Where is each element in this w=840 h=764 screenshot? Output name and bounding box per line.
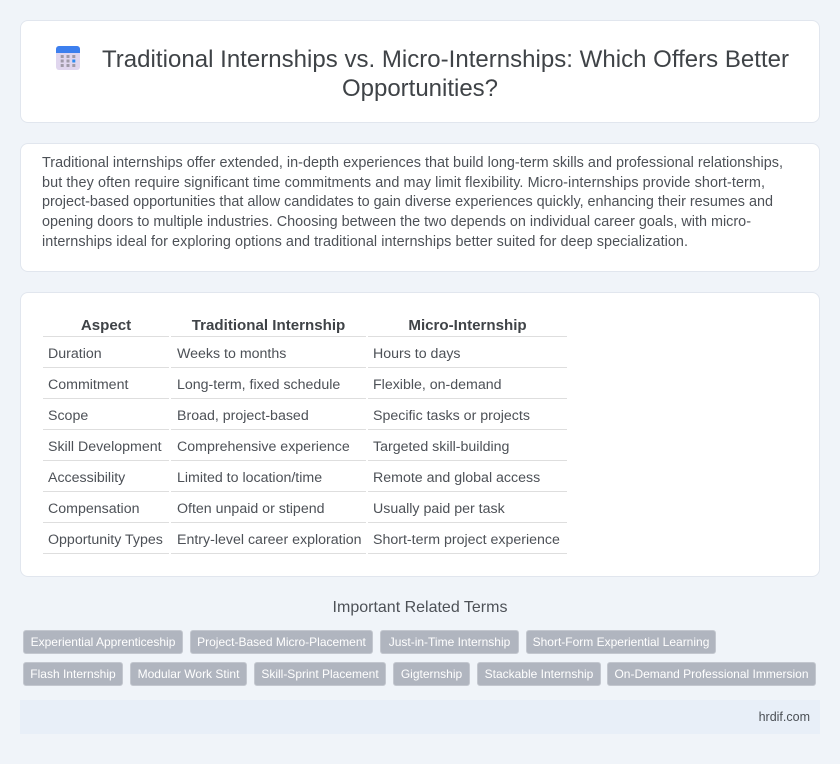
text block: introduction	[42, 155, 783, 250]
row: accessibility	[48, 470, 540, 486]
related terms tags: Stackable Internship	[485, 667, 593, 681]
related terms tags: Project-Based Micro-Placement	[197, 635, 366, 649]
row: skill development	[48, 439, 509, 455]
table header: aspect: Aspect	[81, 317, 131, 334]
related terms tags: Flash Internship	[30, 667, 116, 681]
panel: comparison table	[20, 292, 820, 577]
related terms tags: On-Demand Professional Immersion	[614, 667, 809, 681]
panel: comparison table: Short-term project experience	[373, 532, 560, 548]
row: commitment	[48, 377, 502, 393]
panel: comparison table: Comprehensive experience	[177, 439, 350, 455]
panel: header	[20, 20, 820, 123]
panel: comparison table: Limited to location/time	[177, 470, 322, 486]
related terms tags: Short-Form Experiential Learning	[533, 635, 709, 649]
heading: important related terms: Important Related Terms	[333, 599, 507, 616]
title	[102, 46, 789, 102]
row: skill development: Skill Development	[48, 439, 162, 455]
panel: comparison table: Flexible, on-demand	[373, 377, 502, 393]
row: commitment: Commitment	[48, 377, 128, 393]
panel: comparison table: Long-term, fixed schedule	[177, 377, 340, 393]
panel: comparison table: Specific tasks or projects	[373, 408, 530, 424]
panel: comparison table: Targeted skill-building	[373, 439, 509, 455]
row: duration	[48, 346, 461, 362]
row: accessibility: Accessibility	[48, 470, 125, 486]
text block: introduction: internships ideal for exploring options and traditional internships better suited for deep specialization.	[42, 234, 688, 250]
icon: calendar	[56, 46, 80, 70]
row: compensation: Compensation	[48, 501, 140, 517]
text block: introduction: Traditional internships offer extended, in-depth experiences that build long-term skills and professional relationships,	[42, 155, 783, 171]
related terms tags: Experiential Apprenticeship	[31, 635, 175, 649]
table header: micro-internship: Micro-Internship	[408, 317, 527, 334]
title: Traditional Internships vs. Micro-Internships: Which Offers Better	[102, 46, 789, 73]
row: scope: Scope	[48, 408, 88, 424]
text block: introduction: project-based opportunities that allow candidates to gain diverse experiences quickly, enhancing their resumes and	[42, 194, 773, 210]
table header: traditional internship: Traditional Internship	[192, 317, 345, 334]
panel: comparison table: Usually paid per task	[373, 501, 505, 517]
related terms tags: Just-in-Time Internship	[389, 635, 510, 649]
related terms tags: Gigternship	[401, 667, 462, 681]
panel: introduction	[20, 143, 820, 272]
panel: comparison table: Broad, project-based	[177, 408, 309, 424]
row: opportunity types	[48, 532, 560, 548]
row: scope	[48, 408, 530, 424]
panel: comparison table: Hours to days	[373, 346, 461, 362]
panel: comparison table: Weeks to months	[177, 346, 286, 362]
row: opportunity types: Opportunity Types	[48, 532, 163, 548]
panel: comparison table: Often unpaid or stipend	[177, 501, 324, 517]
panel: comparison table: Entry-level career exploration	[177, 532, 362, 548]
title: Opportunities?	[342, 75, 498, 102]
row: duration: Duration	[48, 346, 102, 362]
text block: introduction: opening doors to multiple industries. Choosing between the two depends on individual career goals, with micro-	[42, 214, 751, 230]
related terms tags	[23, 630, 816, 686]
footer	[20, 700, 820, 734]
row: compensation	[48, 501, 505, 517]
footer source text: hrdif.com	[759, 710, 810, 724]
panel: comparison table: Remote and global access	[373, 470, 540, 486]
related terms tags: Skill-Sprint Placement	[261, 667, 379, 681]
text block: introduction: but they often require significant time commitments and may limit flexibility. Micro-internships provide short-term,	[42, 175, 765, 191]
related terms tags: Modular Work Stint	[138, 667, 239, 681]
